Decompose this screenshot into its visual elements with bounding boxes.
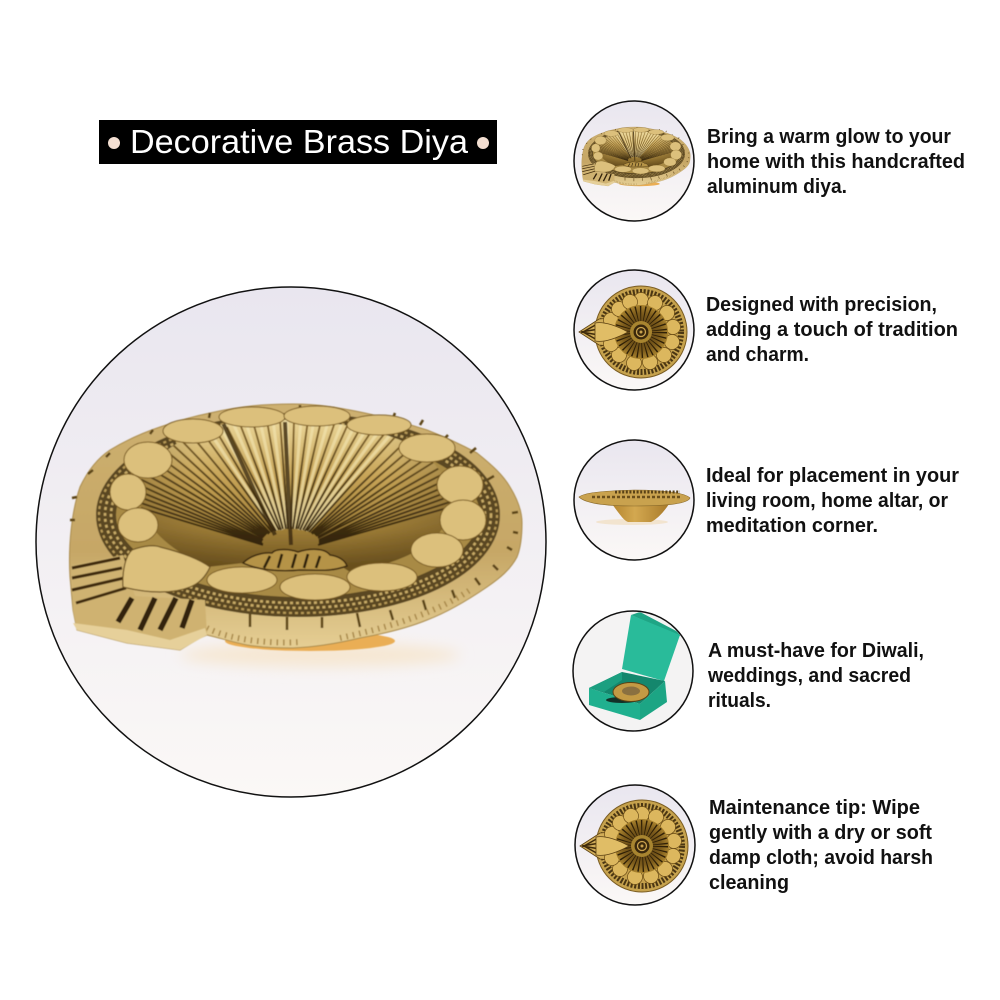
- text block: A must-have for Diwali,: [708, 640, 924, 662]
- outer rim: [69, 404, 522, 650]
- panel: feature 1: [574, 101, 965, 221]
- text block: damp cloth; avoid harsh: [709, 847, 933, 869]
- text block: [707, 126, 965, 198]
- lower rim hatch: [207, 590, 470, 642]
- text block: gently with a dry or soft: [709, 822, 932, 844]
- image circle: [575, 785, 695, 905]
- center ornament: [243, 549, 347, 571]
- panel: feature 3: [574, 440, 959, 560]
- panel: feature 5: [575, 785, 933, 905]
- text block: Maintenance tip: Wipe: [709, 797, 920, 819]
- shadow under diya: [180, 643, 460, 667]
- text block: weddings, and sacred: [707, 665, 911, 687]
- text block: cleaning: [709, 872, 789, 894]
- image circle: [573, 611, 693, 731]
- text block: [706, 294, 958, 366]
- text block: meditation corner.: [706, 515, 878, 537]
- panel: main product photo circle: [36, 287, 546, 797]
- ribbed bowl: [130, 410, 460, 580]
- image circle: [574, 440, 694, 560]
- textured band: [106, 423, 490, 607]
- panel: feature 4: [573, 611, 924, 731]
- text block: [707, 640, 924, 712]
- image circle: [574, 101, 694, 221]
- title banner: [99, 120, 497, 164]
- petals: [110, 406, 486, 600]
- text block: [706, 465, 959, 537]
- text block: adding a touch of tradition: [706, 319, 958, 341]
- text block: and charm.: [706, 344, 809, 366]
- panel: feature 2: [574, 270, 958, 390]
- text block: Ideal for placement in your: [706, 465, 959, 487]
- text block: living room, home altar, or: [706, 490, 948, 512]
- spout: [72, 555, 207, 650]
- rim ticks: [70, 405, 518, 630]
- text block: aluminum diya.: [707, 176, 847, 198]
- title banner: Decorative Brass Diya: [130, 123, 469, 160]
- icon: brass diya: [69, 404, 522, 651]
- text block: Designed with precision,: [706, 294, 937, 316]
- image circle: [574, 270, 694, 390]
- text block: [709, 797, 933, 894]
- text block: Bring a warm glow to your: [707, 126, 951, 148]
- text block: home with this handcrafted: [707, 151, 965, 173]
- base of bowl: [225, 631, 395, 651]
- text block: rituals.: [708, 690, 771, 712]
